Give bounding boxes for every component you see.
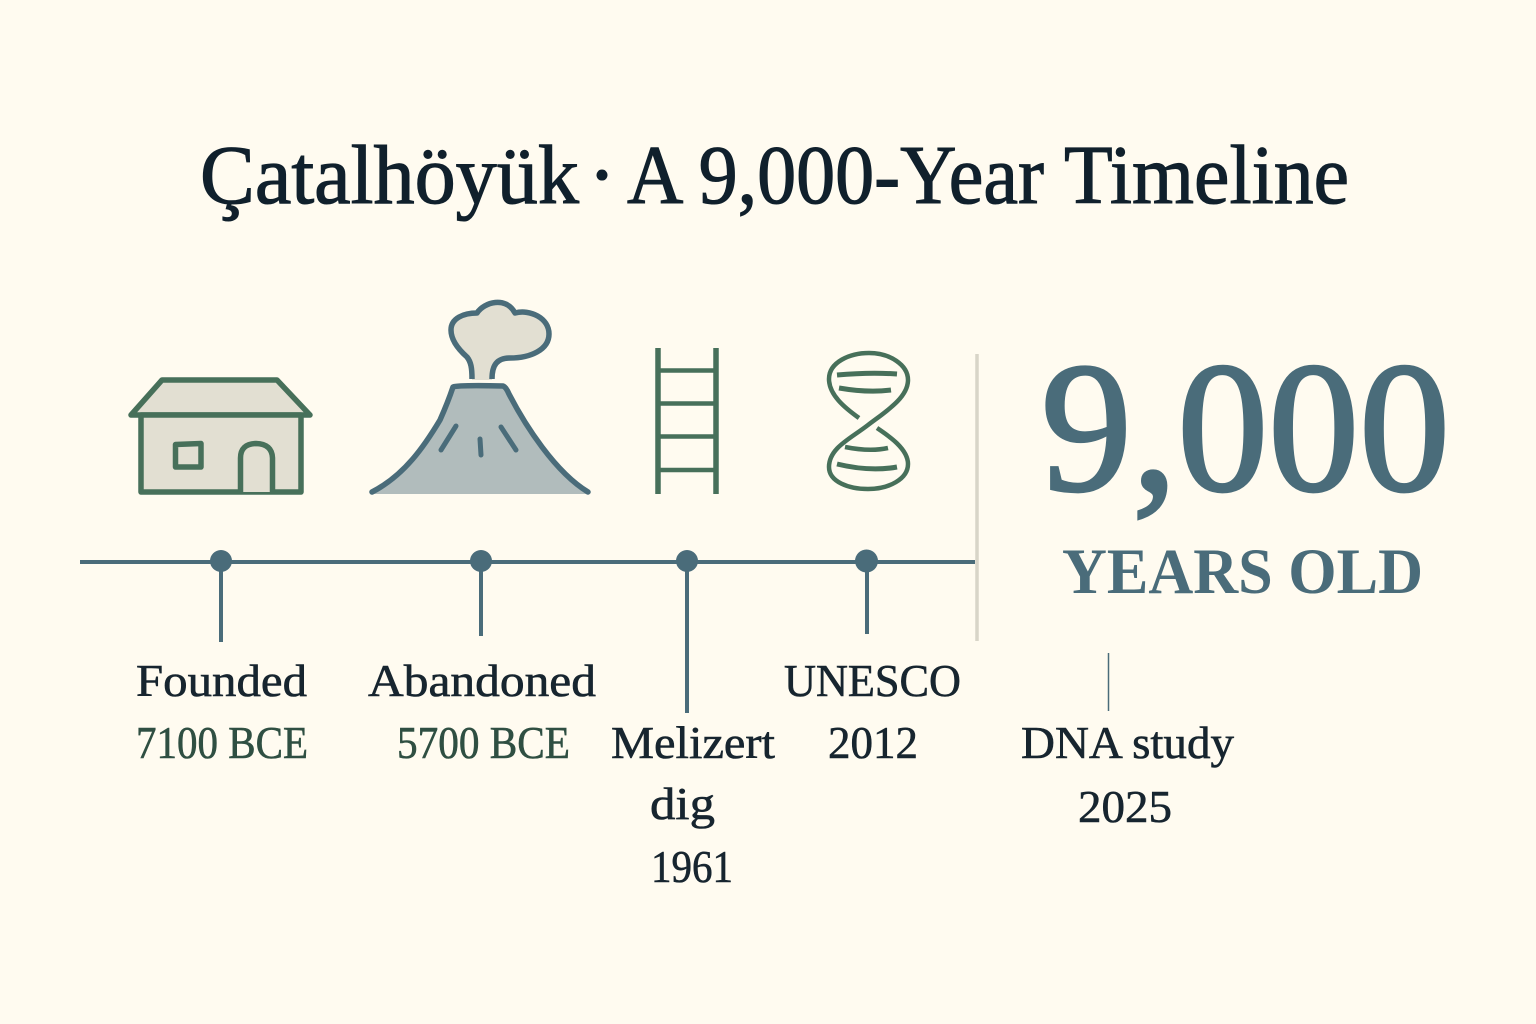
title: · [588,129,616,222]
marker: abandoned [470,550,492,636]
icon: DNA helix [829,353,908,489]
label: abandoned: 5700 BCE [397,717,570,768]
title: A 9,000-Year [627,129,1044,222]
label: Melizert dig: Melizert [611,717,775,768]
label: UNESCO [784,655,961,768]
big number: 9,000 [1041,325,1450,531]
icon: house [131,380,310,492]
label: DNA study: DNA study [1021,717,1234,768]
icon: volcano [372,302,588,494]
icon: ladder [658,348,716,494]
marker: DNA study [1108,653,1110,711]
marker: Melizert dig [676,550,698,713]
label: UNESCO: UNESCO [784,655,961,706]
title: Timeline [1064,129,1349,222]
label: abandoned [368,655,596,768]
label: abandoned: Abandoned [368,655,596,706]
title [200,129,1349,222]
label: Melizert dig [611,717,775,892]
label: DNA study: 2025 [1078,781,1172,832]
label: DNA study [1021,717,1234,832]
label: Melizert dig: 1961 [651,841,733,892]
marker: founded [210,550,232,642]
label: founded [136,655,308,768]
title: Çatalhöyük [200,129,579,222]
label: Melizert dig: dig [650,778,715,829]
label: founded: 7100 BCE [136,717,308,768]
big number caption: YEARS OLD [1062,536,1423,608]
label: founded: Founded [136,655,307,706]
timeline axis [80,550,975,713]
label: UNESCO: 2012 [828,717,918,768]
marker: UNESCO [855,550,878,634]
